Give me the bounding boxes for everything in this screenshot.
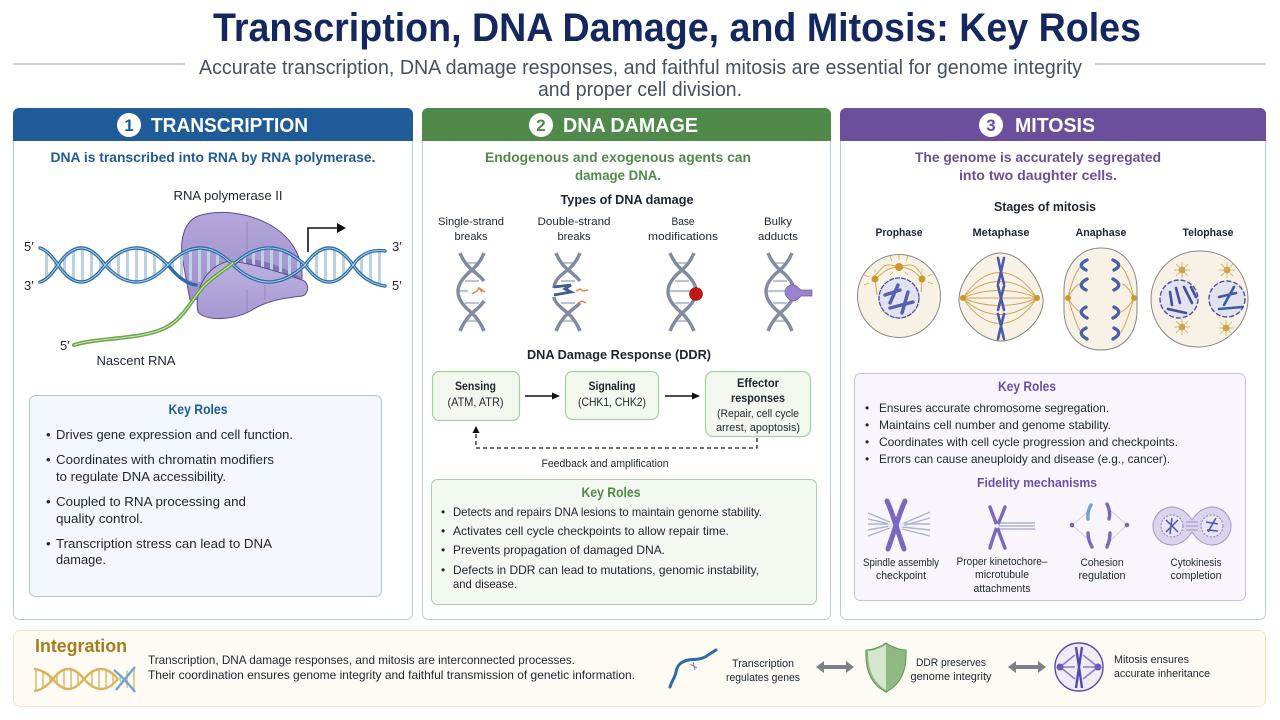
key roles: transcription: quality control.: [56, 511, 143, 526]
flow: DDR: arrest, apoptosis): [716, 422, 800, 434]
mitosis summary: The genome is accurately segregated: [915, 149, 1161, 165]
integration heading: Integration: [35, 636, 127, 656]
key roles: DNA damage: and disease.: [453, 577, 517, 591]
damage type: double-strand breaks: breaks: [558, 231, 591, 243]
damage type: bulky adducts: [758, 216, 812, 331]
key roles: DNA damage: Detects and repairs DNA lesions to maintain genome stability.: [453, 505, 762, 519]
stage: telophase: Telophase: [1182, 227, 1234, 239]
key roles: transcription: to regulate DNA accessibility.: [56, 469, 226, 484]
stage: anaphase: [1064, 227, 1137, 350]
key roles: mitosis: [854, 374, 1246, 600]
label: DDR preserves genome integrity: genome integrity: [910, 671, 992, 683]
icon: direction arrow: [308, 223, 346, 252]
arrow: DDR to mitosis: [1008, 661, 1046, 673]
mechanism: cohesion regulation: Cohesion: [1080, 557, 1124, 569]
label: DDR preserves genome integrity: [910, 657, 992, 683]
panel header: transcription: [13, 108, 413, 141]
damage type: double-strand breaks: Double-strand: [538, 216, 610, 228]
flow: DDR: Effector: [737, 376, 779, 390]
heading: stages of mitosis: Stages of mitosis: [994, 199, 1096, 214]
diagram: RNA polymerase on DNA: [24, 188, 402, 368]
key roles: mitosis: •: [865, 401, 869, 415]
icon: shield: [866, 643, 906, 692]
key roles: mitosis: Key Roles: [998, 379, 1056, 394]
mechanism: kinetochore attachments: [956, 507, 1048, 595]
key roles: mitosis: •: [865, 435, 869, 449]
key roles: DNA damage: [432, 480, 816, 604]
diagram: RNA polymerase on DNA: RNA polymerase II: [174, 188, 282, 203]
damage type: double-strand breaks: [538, 216, 610, 331]
flow: DDR: (Repair, cell cycle: [717, 408, 799, 420]
damage type: base modifications: Base: [672, 216, 694, 228]
flow: DDR: [432, 372, 810, 470]
integration text: [148, 653, 635, 682]
icon: golden DNA: [34, 667, 135, 692]
key roles: DNA damage: •: [441, 563, 445, 577]
key roles: mitosis: •: [865, 452, 869, 466]
flow: DDR: (CHK1, CHK2): [578, 395, 646, 409]
stage: prophase: Prophase: [876, 227, 922, 239]
key roles: transcription: Coordinates with chromatin modifiers: [56, 452, 274, 467]
diagram: RNA polymerase on DNA: 3′: [24, 278, 34, 293]
key roles: mitosis: •: [865, 418, 869, 432]
heading: types of DNA damage: Types of DNA damage: [560, 192, 694, 207]
panel header: mitosis: MITOSIS: [1015, 115, 1095, 137]
mechanism: kinetochore attachments: Proper kinetochore–: [956, 556, 1048, 568]
key roles: mitosis: Maintains cell number and genome stability.: [879, 418, 1111, 432]
panel: mitosis: [840, 108, 1266, 620]
key roles: transcription: damage.: [56, 552, 106, 567]
damage type: single-strand breaks: [438, 216, 504, 331]
title: Transcription, DNA Damage, and Mitosis: Key Roles: [213, 6, 1141, 50]
diagram: RNA polymerase on DNA: 5′: [24, 239, 34, 254]
mechanism: kinetochore attachments: attachments: [974, 583, 1031, 595]
heading: fidelity mechanisms: Fidelity mechanisms: [977, 475, 1097, 490]
integration text: Their coordination ensures genome integrity and faithful transmission of genetic information.: [148, 668, 635, 682]
subtitle: Accurate transcription, DNA damage responses, and faithful mitosis are essential for genome integrity: [199, 57, 1082, 79]
label: transcription regulates genes: Transcription: [732, 658, 794, 670]
damage type: base modifications: [648, 216, 719, 331]
label: mitosis ensures accurate inheritance: [1114, 654, 1210, 680]
key roles: DNA damage: •: [441, 524, 445, 538]
panel header: DNA damage: 2: [536, 116, 546, 135]
arrow: feedback: [472, 426, 757, 448]
panel: DNA damage: [422, 108, 831, 620]
panel: transcription: [13, 108, 413, 620]
damage type: base modifications: modifications: [648, 231, 719, 243]
stage: prophase: [858, 227, 940, 338]
arrow: transcription to DDR: [816, 661, 854, 673]
subtitle: and proper cell division.: [538, 79, 742, 101]
key roles: transcription: •: [46, 452, 51, 467]
diagram: RNA polymerase on DNA: Nascent RNA: [96, 353, 176, 368]
mechanism: spindle assembly checkpoint: checkpoint: [876, 570, 926, 582]
damage type: bulky adducts: Bulky: [764, 216, 793, 228]
key roles: mitosis: Errors can cause aneuploidy and disease (e.g., cancer).: [879, 452, 1170, 466]
panel header: transcription: 1: [124, 116, 134, 135]
key roles: transcription: •: [46, 536, 51, 551]
mechanism: cytokinesis completion: Cytokinesis: [1170, 557, 1222, 569]
diagram: RNA polymerase on DNA: 3′: [392, 239, 402, 254]
key roles: transcription: •: [46, 494, 51, 509]
arrow: signaling to effector: [665, 392, 700, 400]
panel header: mitosis: [840, 108, 1266, 141]
damage type: single-strand breaks: Single-strand: [438, 216, 504, 228]
flow: DDR: Signaling: [588, 379, 636, 393]
diagram: RNA polymerase on DNA: 5′: [60, 338, 70, 353]
key roles: transcription: [30, 396, 382, 596]
key roles: DNA damage: Activates cell cycle checkpoints to allow repair time.: [453, 524, 729, 538]
transcription summary: DNA is transcribed into RNA by RNA polymerase.: [50, 149, 376, 165]
panel: integration: [14, 630, 1266, 706]
key roles: DNA damage: Key Roles: [582, 485, 640, 500]
icon: transcription strand: [670, 650, 716, 687]
mechanism: cohesion regulation: [1070, 504, 1129, 582]
key roles: mitosis: Coordinates with cell cycle progression and checkpoints.: [879, 435, 1178, 449]
stage: anaphase: Anaphase: [1076, 227, 1126, 239]
mechanism: cytokinesis completion: [1153, 507, 1231, 582]
key roles: mitosis: Ensures accurate chromosome segregation.: [879, 401, 1109, 415]
stage: metaphase: Metaphase: [972, 227, 1030, 239]
DNA damage summary: Endogenous and exogenous agents can: [485, 149, 751, 165]
key roles: transcription: Key Roles: [168, 401, 228, 417]
heading: DNA damage response: DNA Damage Response (DDR): [527, 347, 711, 362]
diagram: RNA polymerase on DNA: 5′: [392, 278, 402, 293]
subtitle: [13, 57, 1266, 101]
DNA damage summary: [485, 149, 751, 183]
key roles: DNA damage: Defects in DDR can lead to mutations, genomic instability,: [453, 563, 759, 577]
panel header: DNA damage: [422, 108, 831, 141]
mechanism: kinetochore attachments: microtubule: [975, 569, 1029, 581]
stage: metaphase: [959, 227, 1043, 341]
damage type: bulky adducts: adducts: [758, 231, 799, 243]
DNA damage summary: damage DNA.: [575, 167, 661, 183]
panel header: transcription: TRANSCRIPTION: [151, 115, 308, 137]
mechanism: spindle assembly checkpoint: [863, 501, 939, 582]
label: DDR preserves genome integrity: DDR preserves: [916, 657, 986, 669]
flow: DDR: Feedback and amplification: [542, 458, 668, 470]
key roles: DNA damage: •: [441, 505, 445, 519]
key roles: transcription: •: [46, 427, 51, 442]
icon: mitosis cell: [1055, 643, 1103, 691]
key roles: DNA damage: Prevents propagation of damaged DNA.: [453, 543, 665, 557]
flow: DDR: (ATM, ATR): [448, 395, 504, 409]
flow: DDR: Sensing: [455, 379, 496, 393]
panel header: DNA damage: DNA DAMAGE: [563, 115, 698, 137]
flow: DDR: responses: [731, 391, 785, 405]
key roles: transcription: Coupled to RNA processing and: [56, 494, 246, 509]
mechanism: spindle assembly checkpoint: Spindle assembly: [863, 557, 939, 569]
integration text: Transcription, DNA damage responses, and mitosis are interconnected processes.: [148, 653, 575, 667]
stage: telophase: [1151, 227, 1248, 347]
key roles: DNA damage: •: [441, 543, 445, 557]
panel header: mitosis: 3: [986, 116, 996, 135]
label: mitosis ensures accurate inheritance: Mitosis ensures: [1114, 654, 1189, 666]
arrow: sensing to signaling: [525, 392, 560, 400]
key roles: transcription: Drives gene expression and cell function.: [56, 427, 293, 442]
damage type: single-strand breaks: breaks: [454, 231, 488, 243]
mitosis summary: into two daughter cells.: [959, 167, 1117, 183]
label: mitosis ensures accurate inheritance: accurate inheritance: [1114, 668, 1210, 680]
key roles: transcription: Transcription stress can lead to DNA: [56, 536, 272, 551]
label: transcription regulates genes: [726, 658, 800, 684]
mechanism: cytokinesis completion: completion: [1170, 570, 1222, 582]
label: transcription regulates genes: regulates genes: [726, 672, 800, 684]
mechanism: cohesion regulation: regulation: [1078, 570, 1126, 582]
mitosis summary: [915, 149, 1161, 183]
